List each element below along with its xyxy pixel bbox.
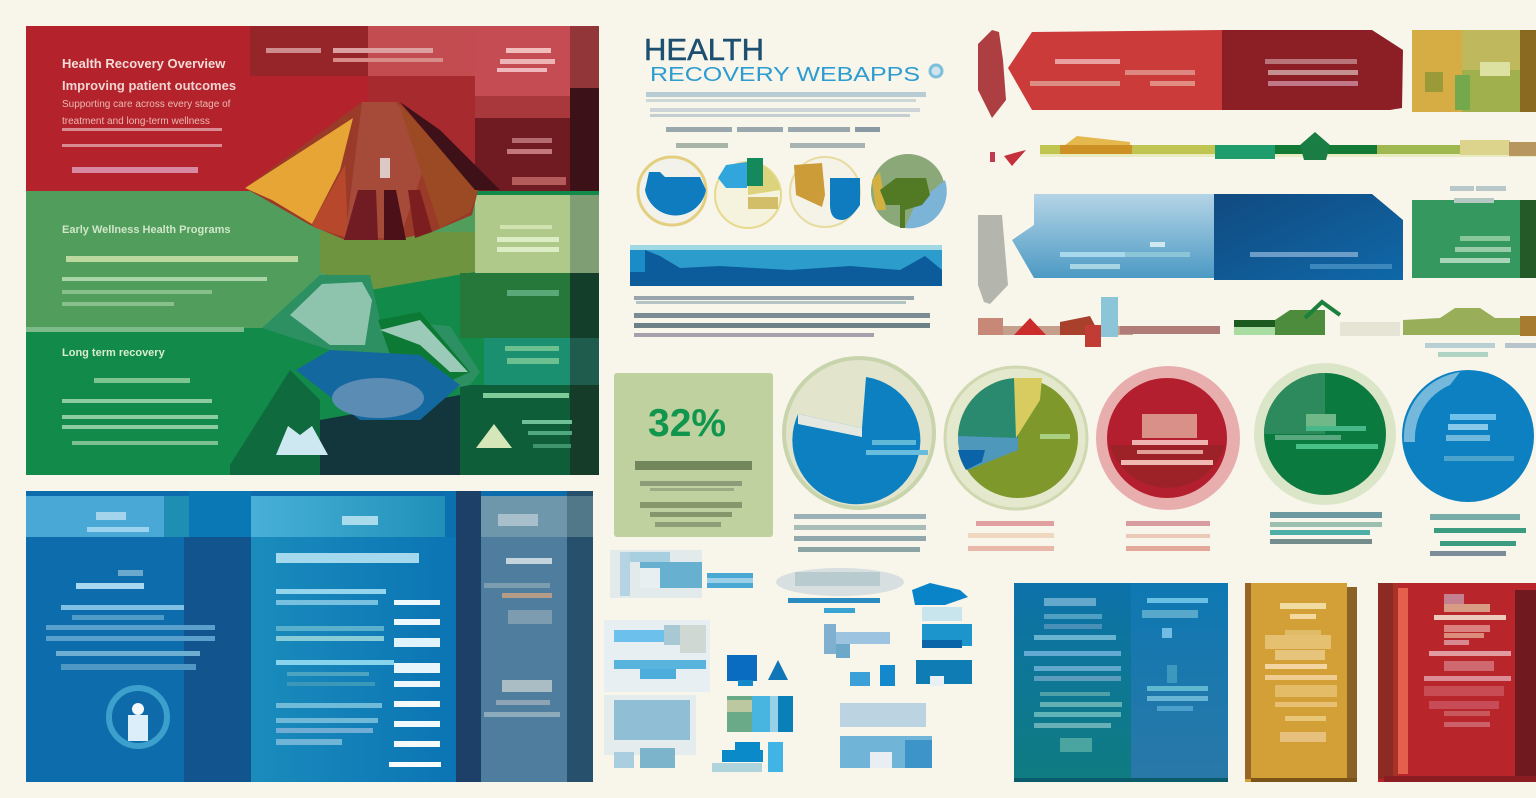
text block (634, 296, 930, 337)
badge: green (1254, 363, 1396, 544)
panel: icon cluster (604, 550, 972, 772)
blue water banner (630, 245, 942, 286)
panel: yellow booklet (1245, 583, 1357, 782)
badge: blue (1402, 370, 1534, 556)
stat card (614, 373, 773, 537)
red section: Health Recovery Overview (62, 56, 226, 71)
red ribbon top right (978, 30, 1403, 118)
blue ribbon (978, 194, 1403, 304)
circle icons row (638, 127, 947, 228)
pie: green yellow (945, 367, 1087, 551)
red section: treatment and long-term wellness (62, 116, 210, 127)
green section (26, 191, 599, 475)
title: HEALTH (644, 32, 764, 67)
green section: Early Wellness Health Programs (62, 224, 231, 236)
icon: person badge (109, 688, 167, 746)
title: RECOVERY WEBAPPS (650, 64, 920, 86)
badge: red (1096, 366, 1240, 551)
green tab (1412, 200, 1536, 278)
title (644, 32, 942, 117)
green section: Long term recovery (62, 347, 166, 359)
captions right of strips (1425, 186, 1536, 357)
stat card: 32% (648, 402, 726, 445)
panel: red and green overview (26, 26, 599, 475)
pie: blue (784, 358, 934, 552)
red section: Supporting care across every stage of (62, 99, 231, 110)
mountain fan graphic (245, 102, 500, 240)
panel: teal booklet (1014, 583, 1228, 782)
timeline strip one (990, 132, 1536, 166)
timeline strip two (978, 297, 1536, 347)
red section: Improving patient outcomes (62, 78, 236, 93)
panel: blue data table (26, 491, 593, 782)
panel: red booklet (1378, 583, 1536, 782)
landscape graphic (262, 275, 512, 455)
yellow green tabs (1412, 30, 1536, 112)
red section (26, 26, 599, 191)
